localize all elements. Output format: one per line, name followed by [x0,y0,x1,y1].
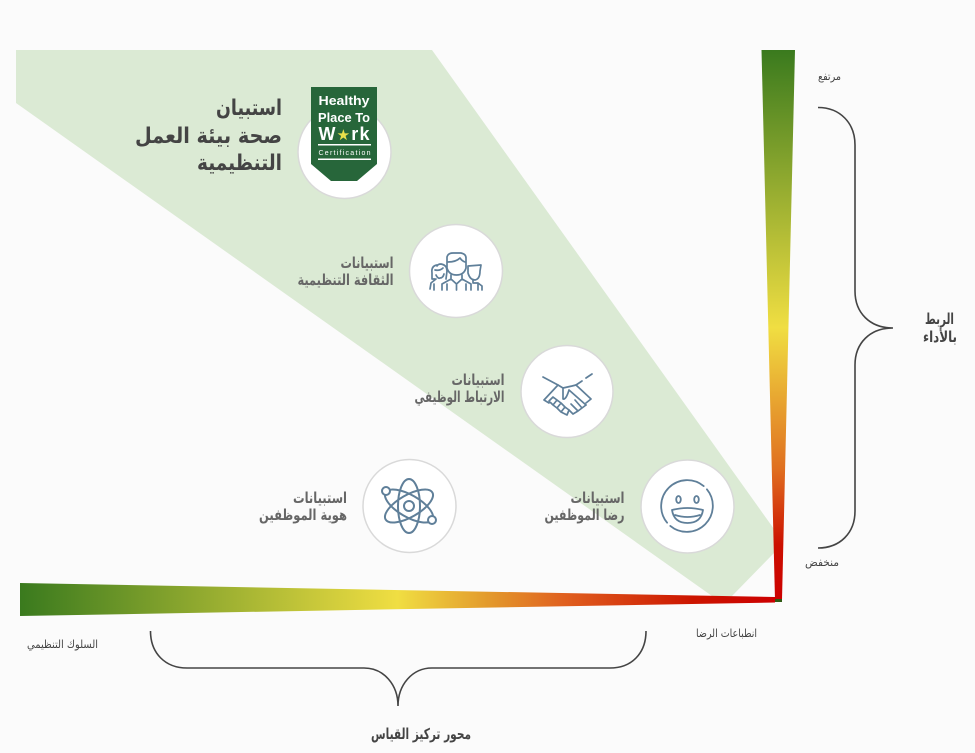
label: satisfaction perceptions: انطباعات الرضا [696,627,757,640]
circle [641,460,734,553]
text: satisfaction surveys: استبيانات [570,489,624,507]
item: employee satisfaction surveys [544,460,734,553]
item: employee identity surveys [259,460,456,552]
heading: healthy workplace survey: التنظيمية [197,151,282,176]
item: employee engagement surveys [414,346,613,438]
text: identity surveys [259,489,347,524]
label: low: منخفض [805,556,839,569]
label: high: مرتفع [818,70,841,83]
text: engagement surveys: استبيانات [452,371,504,389]
text: engagement surveys: الارتباط الوظيفي [414,388,504,406]
icon: group of people [430,253,482,290]
label: measurement focus axis: محور تركيز القياس [371,725,471,743]
label: link to performance: الربط [925,310,954,328]
text: satisfaction surveys [544,489,624,524]
heading: healthy workplace survey [135,96,282,176]
badge: Healthy Place To Work Certification: W★rk [318,124,370,144]
text: culture surveys [298,254,394,289]
badge: Healthy Place To Work Certification: Certification [318,150,371,157]
icon: atom [380,479,438,533]
text: identity surveys: هوية الموظفين [259,506,347,524]
circle behind badge [298,106,391,198]
text: engagement surveys [414,371,504,406]
horizontal gradient axis: measurement focus [20,583,775,616]
heading: healthy workplace survey: استبيان [216,96,282,121]
icon: smiling face [661,480,713,532]
circle [363,460,456,552]
label: organizational behavior: السلوك التنظيمي [27,638,98,651]
badge: Healthy Place To Work Certification [311,87,377,181]
green measurement band [16,50,774,596]
badge: Healthy Place To Work Certification: Healthy [318,93,370,108]
circle [521,346,613,438]
heading: healthy workplace survey: صحة بيئة العمل [135,124,282,149]
label: link to performance: بالأداء [923,328,957,346]
bottom brace [150,631,646,706]
icon: handshake [543,374,592,415]
item: healthy workplace survey [135,87,391,198]
vertical gradient axis: performance link [762,50,795,600]
text: identity surveys: استبيانات [293,489,347,507]
text: culture surveys: استبيانات [340,254,394,272]
item: organizational culture surveys [298,224,502,318]
text: satisfaction surveys: رضا الموظفين [544,506,624,524]
right brace [818,108,893,548]
text: culture surveys: الثقافة التنظيمية [298,271,394,289]
axis corner marker [775,599,782,602]
badge: Healthy Place To Work Certification: Place To [318,110,370,125]
circle [410,224,502,318]
label: link to performance [923,310,957,346]
